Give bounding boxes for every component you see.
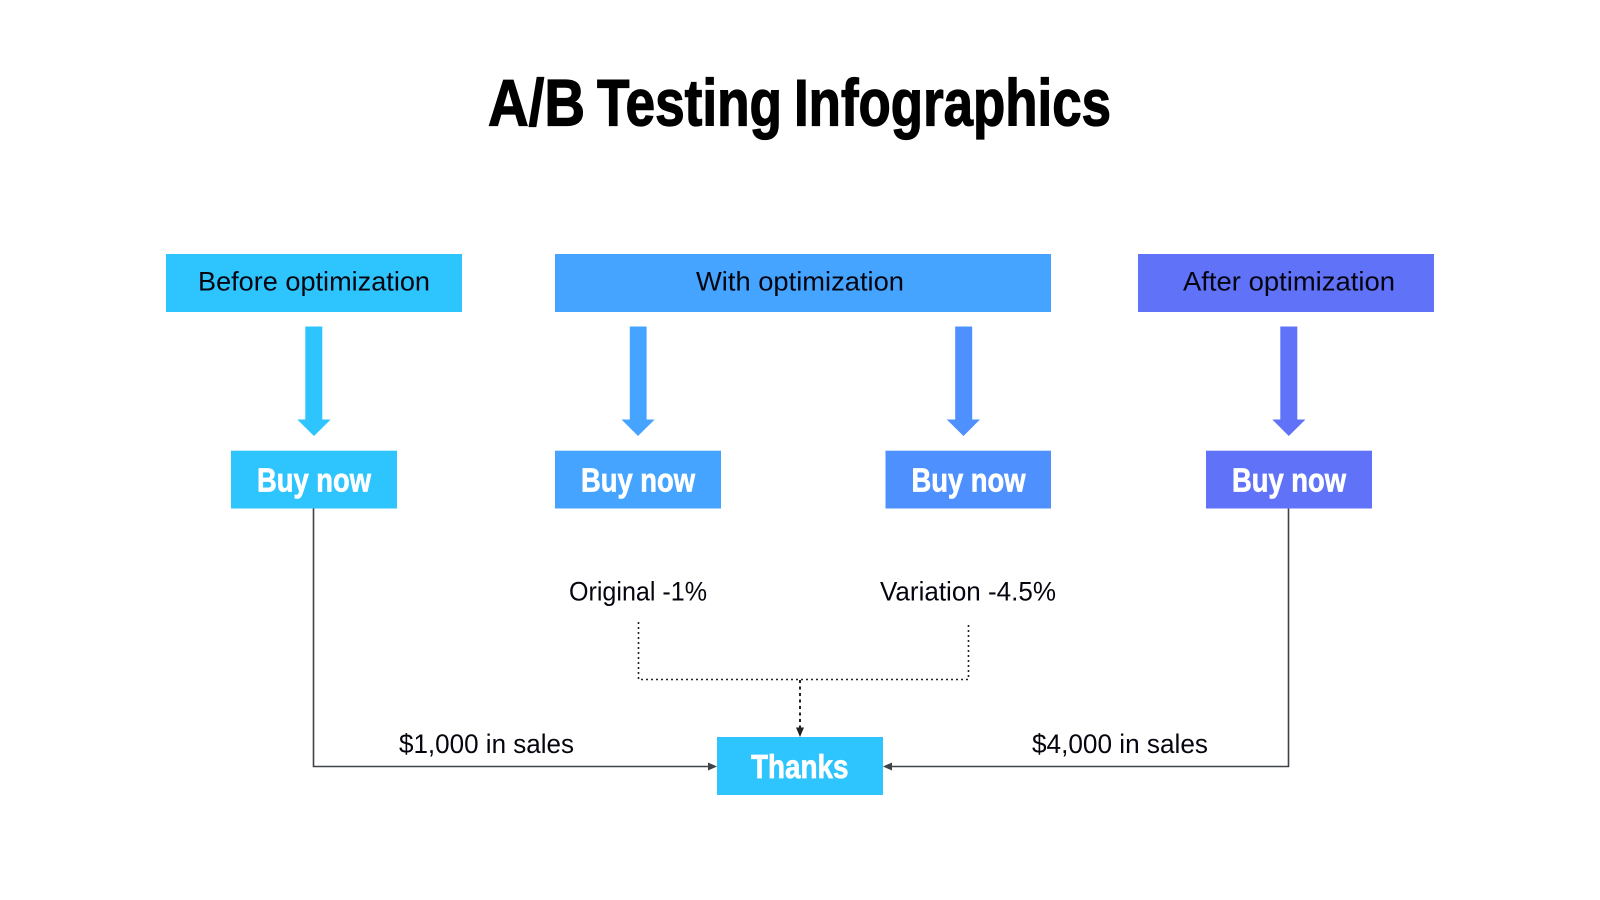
title: Infographics (794, 66, 1111, 140)
connector: before to thanks (314, 508, 717, 770)
header: after optimization: After optimization (1183, 266, 1395, 296)
button: variation buy now (886, 451, 1051, 508)
panel: after optimization (1138, 254, 1434, 508)
button: variation buy now: Buy now (912, 462, 1026, 498)
panel: with optimization (555, 254, 1056, 606)
arrow: original down (622, 326, 655, 436)
button: before buy now (231, 451, 397, 508)
header: before optimization (166, 254, 462, 312)
label: after sales: $4,000 in sales (1032, 729, 1208, 759)
button: before buy now: Buy now (257, 462, 371, 498)
button: thanks (717, 737, 883, 795)
title: A/B (488, 66, 585, 140)
button: original buy now: Buy now (581, 462, 695, 498)
arrow: after down (1272, 326, 1306, 436)
button: after buy now: Buy now (1232, 462, 1346, 498)
label: before sales: $1,000 in sales (399, 729, 574, 759)
header: with optimization (555, 254, 1051, 312)
arrow: variation down (947, 326, 980, 436)
button: thanks: Thanks (751, 748, 848, 785)
header: before optimization: Before optimization (198, 266, 430, 296)
panel: before optimization (166, 254, 462, 508)
connector: after to thanks (883, 508, 1288, 770)
label: variation rate: Variation -4.5% (880, 576, 1056, 606)
title: Testing (597, 66, 782, 140)
connector: dotted merge to thanks (638, 622, 968, 737)
arrow: before down (297, 326, 331, 436)
label: original rate: Original -1% (569, 576, 707, 606)
header: with optimization: With optimization (696, 266, 904, 296)
button: original buy now (555, 451, 721, 508)
button: after buy now (1206, 451, 1372, 508)
header: after optimization (1138, 254, 1434, 312)
title (488, 66, 1111, 140)
